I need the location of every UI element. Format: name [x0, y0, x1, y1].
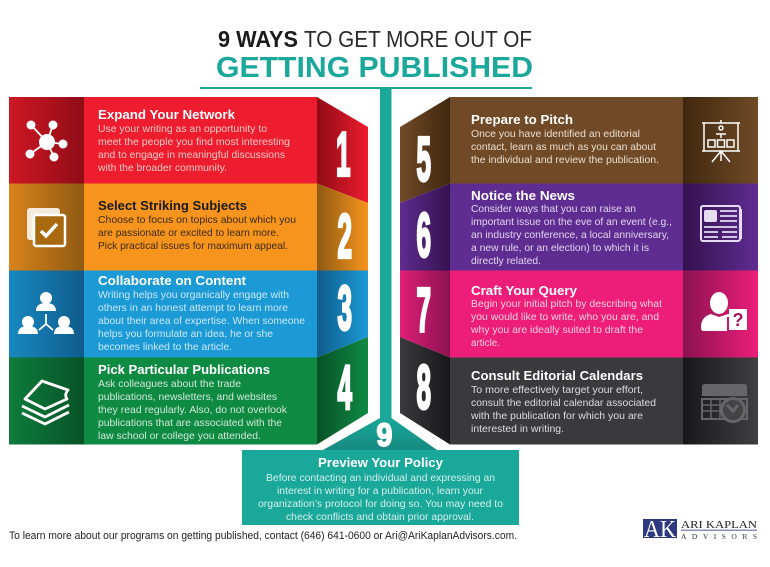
body text: check conflicts and obtain prior approval.: [286, 511, 474, 523]
body text: consult the editorial calendar associated: [471, 397, 656, 409]
footer contact line: To learn more about our programs on getting published, contact (646) 641-0600 or Ari@AriKaplanAdvisors.com.: [9, 530, 517, 542]
panel 8: consult editorial calendars: [400, 337, 758, 444]
body text: publications, newsletters, and websites: [98, 391, 277, 403]
heading: Prepare to Pitch: [471, 112, 573, 127]
body text: important issue on the eve of an event (e.g.,: [471, 216, 672, 228]
title line 1: 9 WAYS: [218, 26, 298, 52]
body text: publications that are associated with the: [98, 417, 282, 429]
body text: Pick practical issues for maximum appeal.: [98, 240, 288, 252]
number 9: 9: [376, 417, 392, 453]
body text: the individual and review the publication.: [471, 154, 659, 166]
body text: are passionate or excited to learn more.: [98, 227, 279, 239]
body text: [258, 472, 503, 523]
body text: meet the people you find most interesting: [98, 136, 290, 148]
panel 9: preview your policy: [242, 417, 519, 525]
logo: Ari Kaplan Advisors: ADVISORS: [681, 532, 757, 541]
body text: Consider ways that you can raise an: [471, 203, 636, 215]
body text: they read regularly. Also, do not overlook: [98, 404, 288, 416]
body text: Ask colleagues about the trade: [98, 378, 241, 390]
number 2: 2: [338, 203, 352, 272]
body text: interest in writing for a publication, learn your: [277, 485, 483, 497]
logo: Ari Kaplan Advisors: [643, 517, 757, 543]
icon: calendar with clock: [702, 384, 747, 422]
icon: checklist cards: [27, 208, 65, 246]
center connector bar: [200, 87, 532, 423]
body text: contact, learn as much as you can about: [471, 141, 656, 153]
icon: presentation board: [702, 120, 740, 162]
body text: [98, 214, 296, 252]
number 5: 5: [416, 126, 431, 195]
heading: Select Striking Subjects: [98, 198, 247, 213]
body text: [470, 384, 656, 435]
body text: becomes linked to the article.: [98, 341, 232, 353]
icon: newspaper: [701, 206, 741, 241]
icon: person with question mark: ?: [732, 310, 744, 330]
body text: Writing helps you organically engage with: [98, 289, 289, 301]
body text: and to engage in meaningful discussions: [98, 149, 285, 161]
body text: Once you have identified an editorial: [471, 128, 640, 140]
body text: why you are ideally suited to draft the: [470, 324, 643, 336]
body text: article.: [471, 337, 500, 349]
heading: Expand Your Network: [98, 107, 236, 122]
body text: with the publication for which you are: [470, 410, 643, 422]
body text: a new rule, or an election) to which it is: [471, 242, 649, 254]
panel 4: pick particular publications: [9, 337, 368, 444]
panel 3: collaborate on content: [9, 270, 368, 358]
title line 2: GETTING PUBLISHED: [216, 52, 533, 84]
body text: about their area of expertise. When someone: [98, 315, 305, 327]
body text: Before contacting an individual and expressing an: [266, 472, 495, 484]
body text: [470, 298, 662, 349]
heading: Collaborate on Content: [98, 273, 247, 288]
body text: Choose to focus on topics about which you: [98, 214, 296, 226]
panel 2: select striking subjects: [9, 184, 368, 272]
body text: Begin your initial pitch by describing what: [471, 298, 662, 310]
icon: paper stack: [22, 381, 69, 424]
heading: Consult Editorial Calendars: [471, 368, 643, 383]
panel 7: craft your query: [400, 270, 758, 358]
body text: Use your writing as an opportunity to: [98, 123, 267, 135]
title line 1: TO GET MORE OUT OF: [304, 26, 532, 52]
heading: Pick Particular Publications: [98, 362, 270, 377]
body text: [98, 289, 305, 353]
body text: [471, 128, 659, 166]
panel 6: notice the news: [400, 184, 758, 271]
number 1: 1: [336, 121, 350, 190]
logo: Ari Kaplan Advisors: ARI KAPLAN: [681, 519, 757, 531]
body text: [471, 203, 672, 267]
body text: others in an honest attempt to learn more: [98, 302, 288, 314]
body text: with the broader community.: [97, 162, 227, 174]
heading: Craft Your Query: [471, 283, 578, 298]
number 6: 6: [416, 202, 431, 271]
body text: helps you formulate an idea, he or she: [98, 328, 273, 340]
heading: Preview Your Policy: [318, 455, 444, 470]
body text: To more effectively target your effort,: [471, 384, 643, 396]
number 3: 3: [338, 275, 352, 344]
body text: interested in writing.: [471, 423, 564, 435]
number 8: 8: [416, 354, 431, 423]
icon: network: [26, 121, 67, 161]
body text: [98, 378, 288, 442]
title: [216, 26, 533, 84]
body text: directly related.: [471, 255, 541, 267]
body text: [97, 123, 290, 174]
icon: connected people: [18, 292, 74, 334]
logo: Ari Kaplan Advisors: AK: [644, 517, 677, 543]
body text: law school or college you attended.: [98, 430, 261, 442]
panel 1: expand your network: [9, 97, 368, 203]
body text: you would like to write, who you are, and: [471, 311, 659, 323]
panel 5: prepare to pitch: [400, 97, 758, 203]
icon: person with question mark: [701, 292, 747, 331]
body text: organization’s protocol for doing so. You may need to: [258, 498, 503, 510]
number 4: 4: [338, 354, 352, 423]
number 7: 7: [416, 277, 431, 346]
heading: Notice the News: [471, 188, 575, 203]
body text: an industry conference, a local anniversary,: [471, 229, 669, 241]
